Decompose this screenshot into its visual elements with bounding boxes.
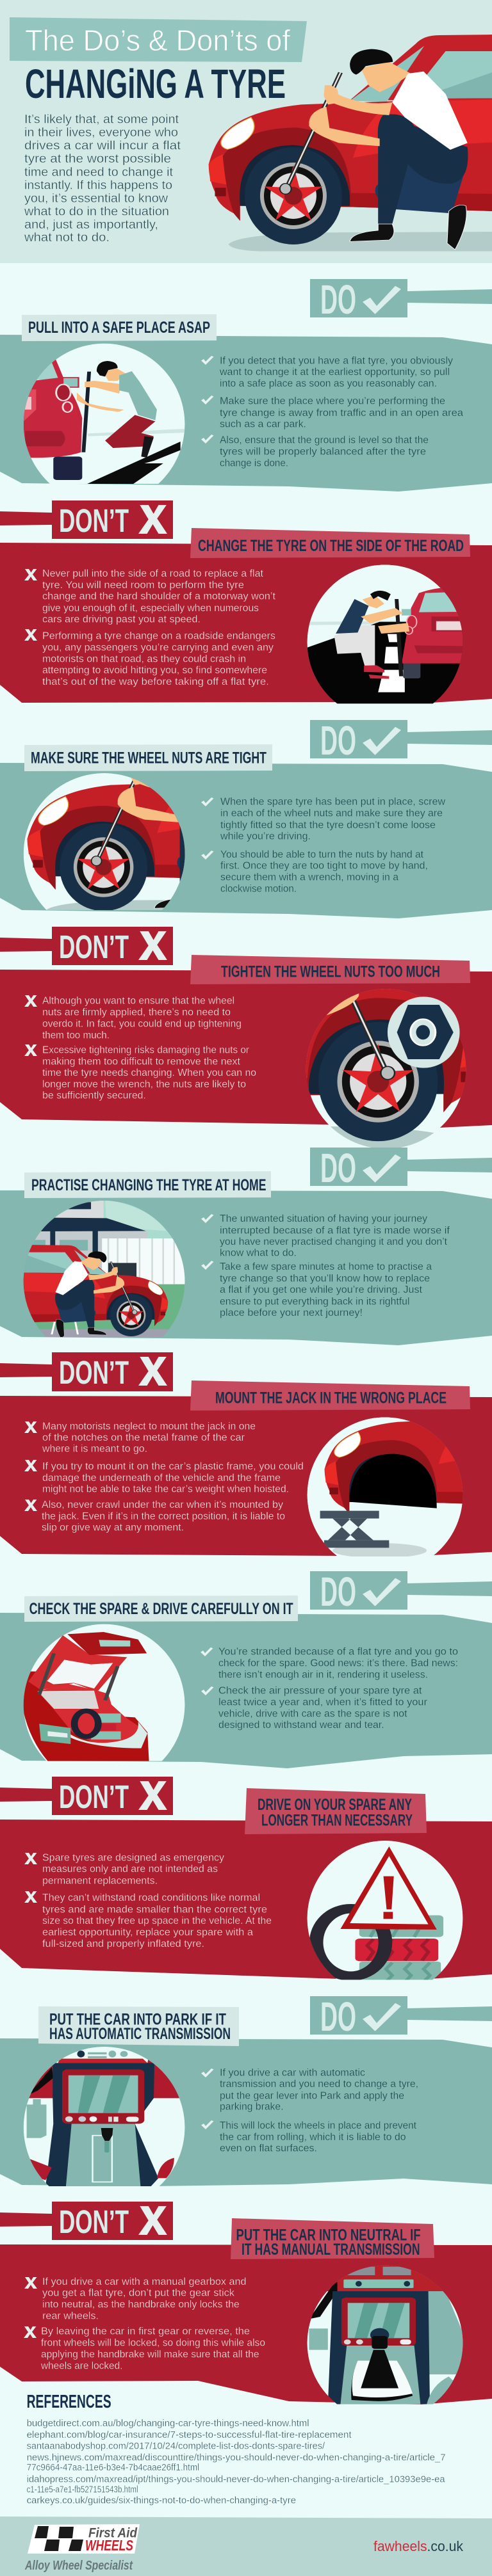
text: don't list 5: If you drive a car with a manual gearbox and xyxy=(42,2276,246,2287)
references list: 77c9664-47aa-11e6-b3e4-7b4caae26ff1.html xyxy=(27,2462,199,2473)
heading: DRIVE ON YOUR SPARE ANY xyxy=(258,1796,412,1814)
text: don't list 4: measures only and are not intended as xyxy=(42,1864,218,1875)
text: don't list 1: tyre. You will need room to perform the tyre xyxy=(42,580,244,591)
DON'T badge 4: DON’T xyxy=(59,1779,129,1815)
heading: PUT THE CAR INTO NEUTRAL IF xyxy=(236,2227,420,2244)
text: do list 5: If you drive a car with automatic xyxy=(220,2067,365,2078)
title banner xyxy=(10,17,307,62)
text: don't list 1 xyxy=(24,568,276,687)
intro text: time and need to change it xyxy=(24,166,174,179)
text: do list 5 xyxy=(201,2067,418,2154)
heading: LONGER THAN NECESSARY xyxy=(261,1811,413,1829)
website: fawheels.co.uk xyxy=(373,2538,464,2554)
panel: put the car into neutral xyxy=(0,2218,492,2420)
illustration: jack under car xyxy=(308,1417,463,1556)
text: don't list 3: slip or give way at any moment. xyxy=(42,1523,184,1533)
text: don't list 3: Also, never crawl under the car when it’s mounted by xyxy=(42,1500,283,1510)
text: do list 2: clockwise motion. xyxy=(220,883,297,894)
tagline: Alloy Wheel Specialist xyxy=(24,2559,133,2573)
DON'T badge 3: DON’T xyxy=(59,1354,129,1391)
text: do list 3: The unwanted situation of having your journey xyxy=(220,1213,427,1224)
DON'T badge 2: DON’T xyxy=(59,929,129,965)
DON'T badge 4 xyxy=(0,1777,173,1815)
text: do list 2: tightly fitted so that the tyre doesn’t come loose xyxy=(220,820,436,831)
text: don't list 1: change and the hard shoulder of a motorway won’t xyxy=(42,591,276,602)
panel: drive on spare too long xyxy=(0,1788,492,1996)
text: do list 1: tyre change is away from traffic and in an open area xyxy=(220,408,463,419)
DO badge 4: DO xyxy=(320,1569,356,1615)
text: don't list 2 xyxy=(24,995,256,1101)
illustration: warning triangle and tyres xyxy=(308,1841,463,1980)
text: do list 3 xyxy=(201,1213,450,1318)
text: do list 3: place before your next journey! xyxy=(220,1308,363,1318)
text: do list 1: into a safe place as soon as you reasonably can. xyxy=(220,378,437,389)
DO badge 3: DO xyxy=(320,1145,356,1191)
text: don't list 5: rear wheels. xyxy=(42,2310,99,2321)
references heading: REFERENCES xyxy=(27,2392,111,2412)
DON'T badge 3 xyxy=(0,1352,173,1391)
text: do list 5: even on flat surfaces. xyxy=(220,2143,317,2154)
references list: santaanabodyshop.com/2017/10/24/complete-list-dos-donts-spare-tires/ xyxy=(27,2441,325,2452)
text: don't list 4: tyres and are made smaller than the correct tyre xyxy=(42,1904,267,1915)
text: don't list 4 xyxy=(24,1852,272,1949)
heading: PUT THE CAR INTO PARK IF IT xyxy=(49,2010,226,2028)
text: don't list 2: be sufficiently secured. xyxy=(42,1091,146,1101)
text: do list 5: put the gear lever into Park and apply the xyxy=(220,2090,404,2101)
text: don't list 5: into neutral, as the handbrake only locks the xyxy=(42,2300,240,2310)
references list: c1-11e5-a7e1-fb527151543b.html xyxy=(27,2484,138,2495)
illustration: automatic gear console xyxy=(23,2047,184,2186)
text: do list 1: change is done. xyxy=(220,458,288,469)
text: don't list 5: applying the handbrake will make sure that all the xyxy=(41,2349,259,2360)
heading: MAKE SURE THE WHEEL NUTS ARE TIGHT xyxy=(31,749,266,767)
DON'T badge 5 xyxy=(0,2202,173,2240)
title banner: The Do’s & Don’ts of xyxy=(25,24,290,57)
text: don't list 3: damage the underneath of the vehicle and the frame xyxy=(42,1473,281,1484)
text: do list 2: You should be able to turn the nuts by hand at xyxy=(220,849,424,860)
text: do list 4 xyxy=(201,1647,458,1731)
text: don't list 2: Although you want to ensure that the wheel xyxy=(42,995,234,1006)
logo: First Aid Wheels: First Aid xyxy=(88,2525,138,2540)
text: do list 3: a flat if you get one while you’re driving. Just xyxy=(220,1284,423,1295)
intro text xyxy=(24,113,181,244)
text: don't list 1: you, any passengers you’re carrying and even any xyxy=(42,643,274,653)
text: do list 5: transmission and you need to change a tyre, xyxy=(220,2079,418,2090)
text: don't list 4: full-sized and properly inflated tyre. xyxy=(42,1939,204,1949)
text: don't list 3: Many motorists neglect to mount the jack in one xyxy=(42,1421,256,1432)
text: do list 4: there isn’t enough air in it, rendering it useless. xyxy=(218,1669,428,1680)
panel: check the spare xyxy=(0,1596,492,1786)
heading xyxy=(24,1171,271,1198)
heading: PRACTISE CHANGING THE TYRE AT HOME xyxy=(31,1176,266,1194)
panel: header xyxy=(0,0,492,263)
main title: CHANGiNG A TYRE xyxy=(25,61,286,107)
text: don't list 1: that’s out of the way before taking off a flat tyre. xyxy=(42,676,269,687)
text: do list 1: want to change it at the earliest opportunity, so pull xyxy=(219,367,450,378)
illustration: man changing tyre on red car xyxy=(209,34,492,252)
heading xyxy=(190,528,470,558)
intro text: you, it’s essential to know xyxy=(24,192,168,205)
heading xyxy=(38,2006,239,2046)
text: don't list 5 xyxy=(24,2276,265,2372)
text: don't list 1: motorists on that road, as they could crash in xyxy=(42,653,246,664)
heading xyxy=(22,314,217,341)
text: don't list 3: the jack. Even if it’s in the correct position, it is liable to xyxy=(42,1511,285,1522)
text: don't list 2: longer move the wrench, the nuts are likely to xyxy=(42,1079,246,1090)
text: don't list 5: By leaving the car in first gear or reverse, the xyxy=(41,2326,250,2337)
intro text: instantly. If this happens to xyxy=(24,179,172,192)
references list: idahopress.com/maxread/ipt/things-you-should-never-do-when-changing-a-tire/article_10393e9e-ea xyxy=(27,2474,445,2484)
intro text: what to do in the situation xyxy=(24,205,169,219)
text: do list 5: the car from rolling, which it is liable to do xyxy=(220,2132,406,2143)
illustration: house and car xyxy=(23,1201,184,1337)
icon: cracked nut xyxy=(388,996,460,1068)
text: do list 2 xyxy=(201,797,445,894)
text: do list 1: Also, ensure that the ground is level so that the xyxy=(220,435,429,446)
illustration: open car boot with spare xyxy=(23,1624,184,1761)
text: do list 2: first. Once they are too tight to move by hand, xyxy=(220,861,428,872)
text: do list 3: Take a few spare minutes at home to practise a xyxy=(220,1261,432,1272)
logo: First Aid Wheels xyxy=(28,2524,140,2554)
heading: IT HAS MANUAL TRANSMISSION xyxy=(242,2241,420,2259)
text: do list 4: least twice a year and, when it’s fitted to your xyxy=(218,1697,428,1708)
heading xyxy=(24,744,272,771)
heading: CHECK THE SPARE & DRIVE CAREFULLY ON IT xyxy=(29,1600,293,1618)
text: do list 4: designed to withstand wear and tear. xyxy=(218,1720,384,1731)
DO badge 1: DO xyxy=(320,276,356,323)
references xyxy=(27,2392,446,2506)
text: do list 2: When the spare tyre has been put in place, screw xyxy=(220,797,445,808)
illustration: manual gear stick xyxy=(308,2266,463,2404)
text: don't list 4: They can’t withstand road conditions like normal xyxy=(42,1892,260,1903)
references list: elephant.com/blog/car-insurance/7-steps-to-successful-flat-tire-replacement xyxy=(27,2429,352,2440)
text: don't list 1: Never pull into the side of a road to replace a flat xyxy=(42,568,264,579)
heading xyxy=(190,1380,470,1411)
text: do list 5: parking brake. xyxy=(220,2102,283,2113)
DO badge 4 xyxy=(310,1569,492,1615)
text: don't list 1: Performing a tyre change on a roadside endangers xyxy=(42,630,275,641)
text: don't list 2: Excessive tightening risks damaging the nuts or xyxy=(42,1045,250,1056)
text: do list 1: such as a car park. xyxy=(220,419,306,430)
DO badge 5: DO xyxy=(320,1994,356,2040)
text: do list 1: Make sure the place where you’re performing the xyxy=(220,396,445,407)
panel: tighten too much xyxy=(0,955,492,1148)
intro text: drives a car will incur a flat xyxy=(24,140,181,152)
DO badge 1 xyxy=(310,276,492,323)
text: don't list 3: of the notches on the metal frame of the car xyxy=(42,1432,245,1443)
text: don't list 1: attempting to avoid hitting you, so find somewhere xyxy=(42,665,267,676)
text: do list 3: tyre change so that you’ll know how to replace xyxy=(220,1273,430,1284)
references list: news.hjnews.com/maxread/discounttire/things-you-should-never-do-when-changing-a-tire/article_7 xyxy=(27,2452,446,2463)
text: do list 4: check for the spare. Good news: it’s there. Bad news: xyxy=(218,1658,458,1668)
text: do list 3: know what to do. xyxy=(220,1248,297,1259)
text: do list 2: in each of the wheel nuts and make sure they are xyxy=(220,808,443,819)
heading: HAS AUTOMATIC TRANSMISSION xyxy=(49,2025,231,2043)
text: don't list 4: earliest opportunity, replace your spare with a xyxy=(42,1927,253,1938)
text: don't list 1: give you enough of it, especially when numerous xyxy=(42,603,259,614)
footer xyxy=(0,2516,492,2576)
text: do list 3: interrupted because of a flat tyre is made worse if xyxy=(220,1225,450,1236)
text: don't list 2: time the tyre needs changing. When you can no xyxy=(42,1068,256,1078)
DON'T badge 1: DON’T xyxy=(59,502,129,539)
text: don't list 5: you get a flat tyre, don’t put the gear stick xyxy=(42,2288,235,2299)
text: don't list 3: If you try to mount it on the car’s plastic frame, you could xyxy=(42,1461,304,1472)
man figure xyxy=(280,49,468,250)
logo: First Aid Wheels: WHEELS xyxy=(85,2537,134,2554)
DO badge 2 xyxy=(310,717,492,764)
text: don't list 2: overdo it. In fact, you could end up tightening xyxy=(42,1018,242,1029)
text: do list 4: vehicle, drive with care as the spare is not xyxy=(218,1708,407,1719)
text: don't list 2: them too much. xyxy=(42,1030,110,1041)
DO badge 3 xyxy=(310,1145,492,1191)
DON'T badge 5: DON’T xyxy=(59,2204,129,2240)
heading xyxy=(245,1788,427,1834)
intro text: what not to do. xyxy=(24,231,110,244)
illustration: man by roadside xyxy=(308,564,463,704)
panel: practise at home xyxy=(0,1171,492,1362)
text: don't list 5: wheels are locked. xyxy=(40,2361,122,2372)
text: do list 5: This will lock the wheels in place and prevent xyxy=(220,2120,417,2131)
panel: put the car into park xyxy=(0,2006,492,2186)
intro text: tyre at the worst possible xyxy=(24,152,171,166)
heading xyxy=(24,1596,298,1622)
text: do list 2: while you’re driving. xyxy=(220,831,311,842)
DO badge 2: DO xyxy=(320,717,356,764)
text: don't list 3: where it is meant to go. xyxy=(42,1444,147,1455)
text: do list 3: ensure to put everything back in its rightful xyxy=(220,1296,410,1307)
text: don't list 3 xyxy=(24,1421,304,1533)
illustration: wheel close-up with wrench xyxy=(23,773,184,910)
heading xyxy=(190,955,470,984)
DON'T badge 2 xyxy=(0,927,173,965)
text: do list 1 xyxy=(201,355,463,469)
text: don't list 2: making them too difficult to remove the next xyxy=(42,1056,241,1067)
car body xyxy=(209,34,492,221)
heading: PULL INTO A SAFE PLACE ASAP xyxy=(28,319,210,337)
text: do list 2: secure them with a wrench, moving in a xyxy=(220,872,398,883)
panel: pull into a safe place xyxy=(0,314,492,505)
text: don't list 4: Spare tyres are designed as emergency xyxy=(42,1852,224,1863)
intro text: It’s likely that, at some point xyxy=(24,113,179,127)
text: do list 4: Check the air pressure of your spare tyre at xyxy=(218,1686,422,1697)
text: don't list 2: nuts are firmly applied, there’s no need to xyxy=(42,1007,231,1018)
illustration: wheel with cracked nut xyxy=(306,989,466,1148)
references list xyxy=(27,2418,446,2506)
text: don't list 4: permanent replacements. xyxy=(42,1875,158,1886)
panel: mount the jack xyxy=(0,1380,492,1556)
panel: change the tyre on the side of the road xyxy=(0,528,492,720)
intro text: in their lives, everyone who xyxy=(24,126,178,140)
text: don't list 3: might not be able to take the car’s weight when hoisted. xyxy=(42,1484,289,1495)
references list: budgetdirect.com.au/blog/changing-car-tyre-things-need-know.html xyxy=(27,2418,309,2429)
references list: carkeys.co.uk/guides/six-things-not-to-do-when-changing-a-tyre xyxy=(27,2495,296,2506)
intro text: and, just as importantly, xyxy=(24,218,158,232)
text: do list 3: you have never practised changing it and you don’t xyxy=(220,1236,448,1247)
DON'T badge 1 xyxy=(0,500,173,539)
DO badge 5 xyxy=(310,1994,492,2040)
illustration: man at rear of car xyxy=(23,343,184,484)
text: don't list 4: size so that they free up space in the vehicle. At the xyxy=(42,1916,272,1926)
text: do list 4: You’re stranded because of a flat tyre and you go to xyxy=(218,1647,458,1658)
heading xyxy=(231,2218,434,2259)
text: do list 1: If you detect that you have a flat tyre, you obviously xyxy=(220,355,453,366)
text: do list 1: tyres will be properly balanced after the tyre xyxy=(220,447,426,458)
panel: wheel nuts tight xyxy=(0,744,492,918)
text: don't list 5: front wheels will be locked, so doing this while also xyxy=(41,2338,265,2349)
text: don't list 1: cars are driving past you at speed. xyxy=(42,614,201,625)
